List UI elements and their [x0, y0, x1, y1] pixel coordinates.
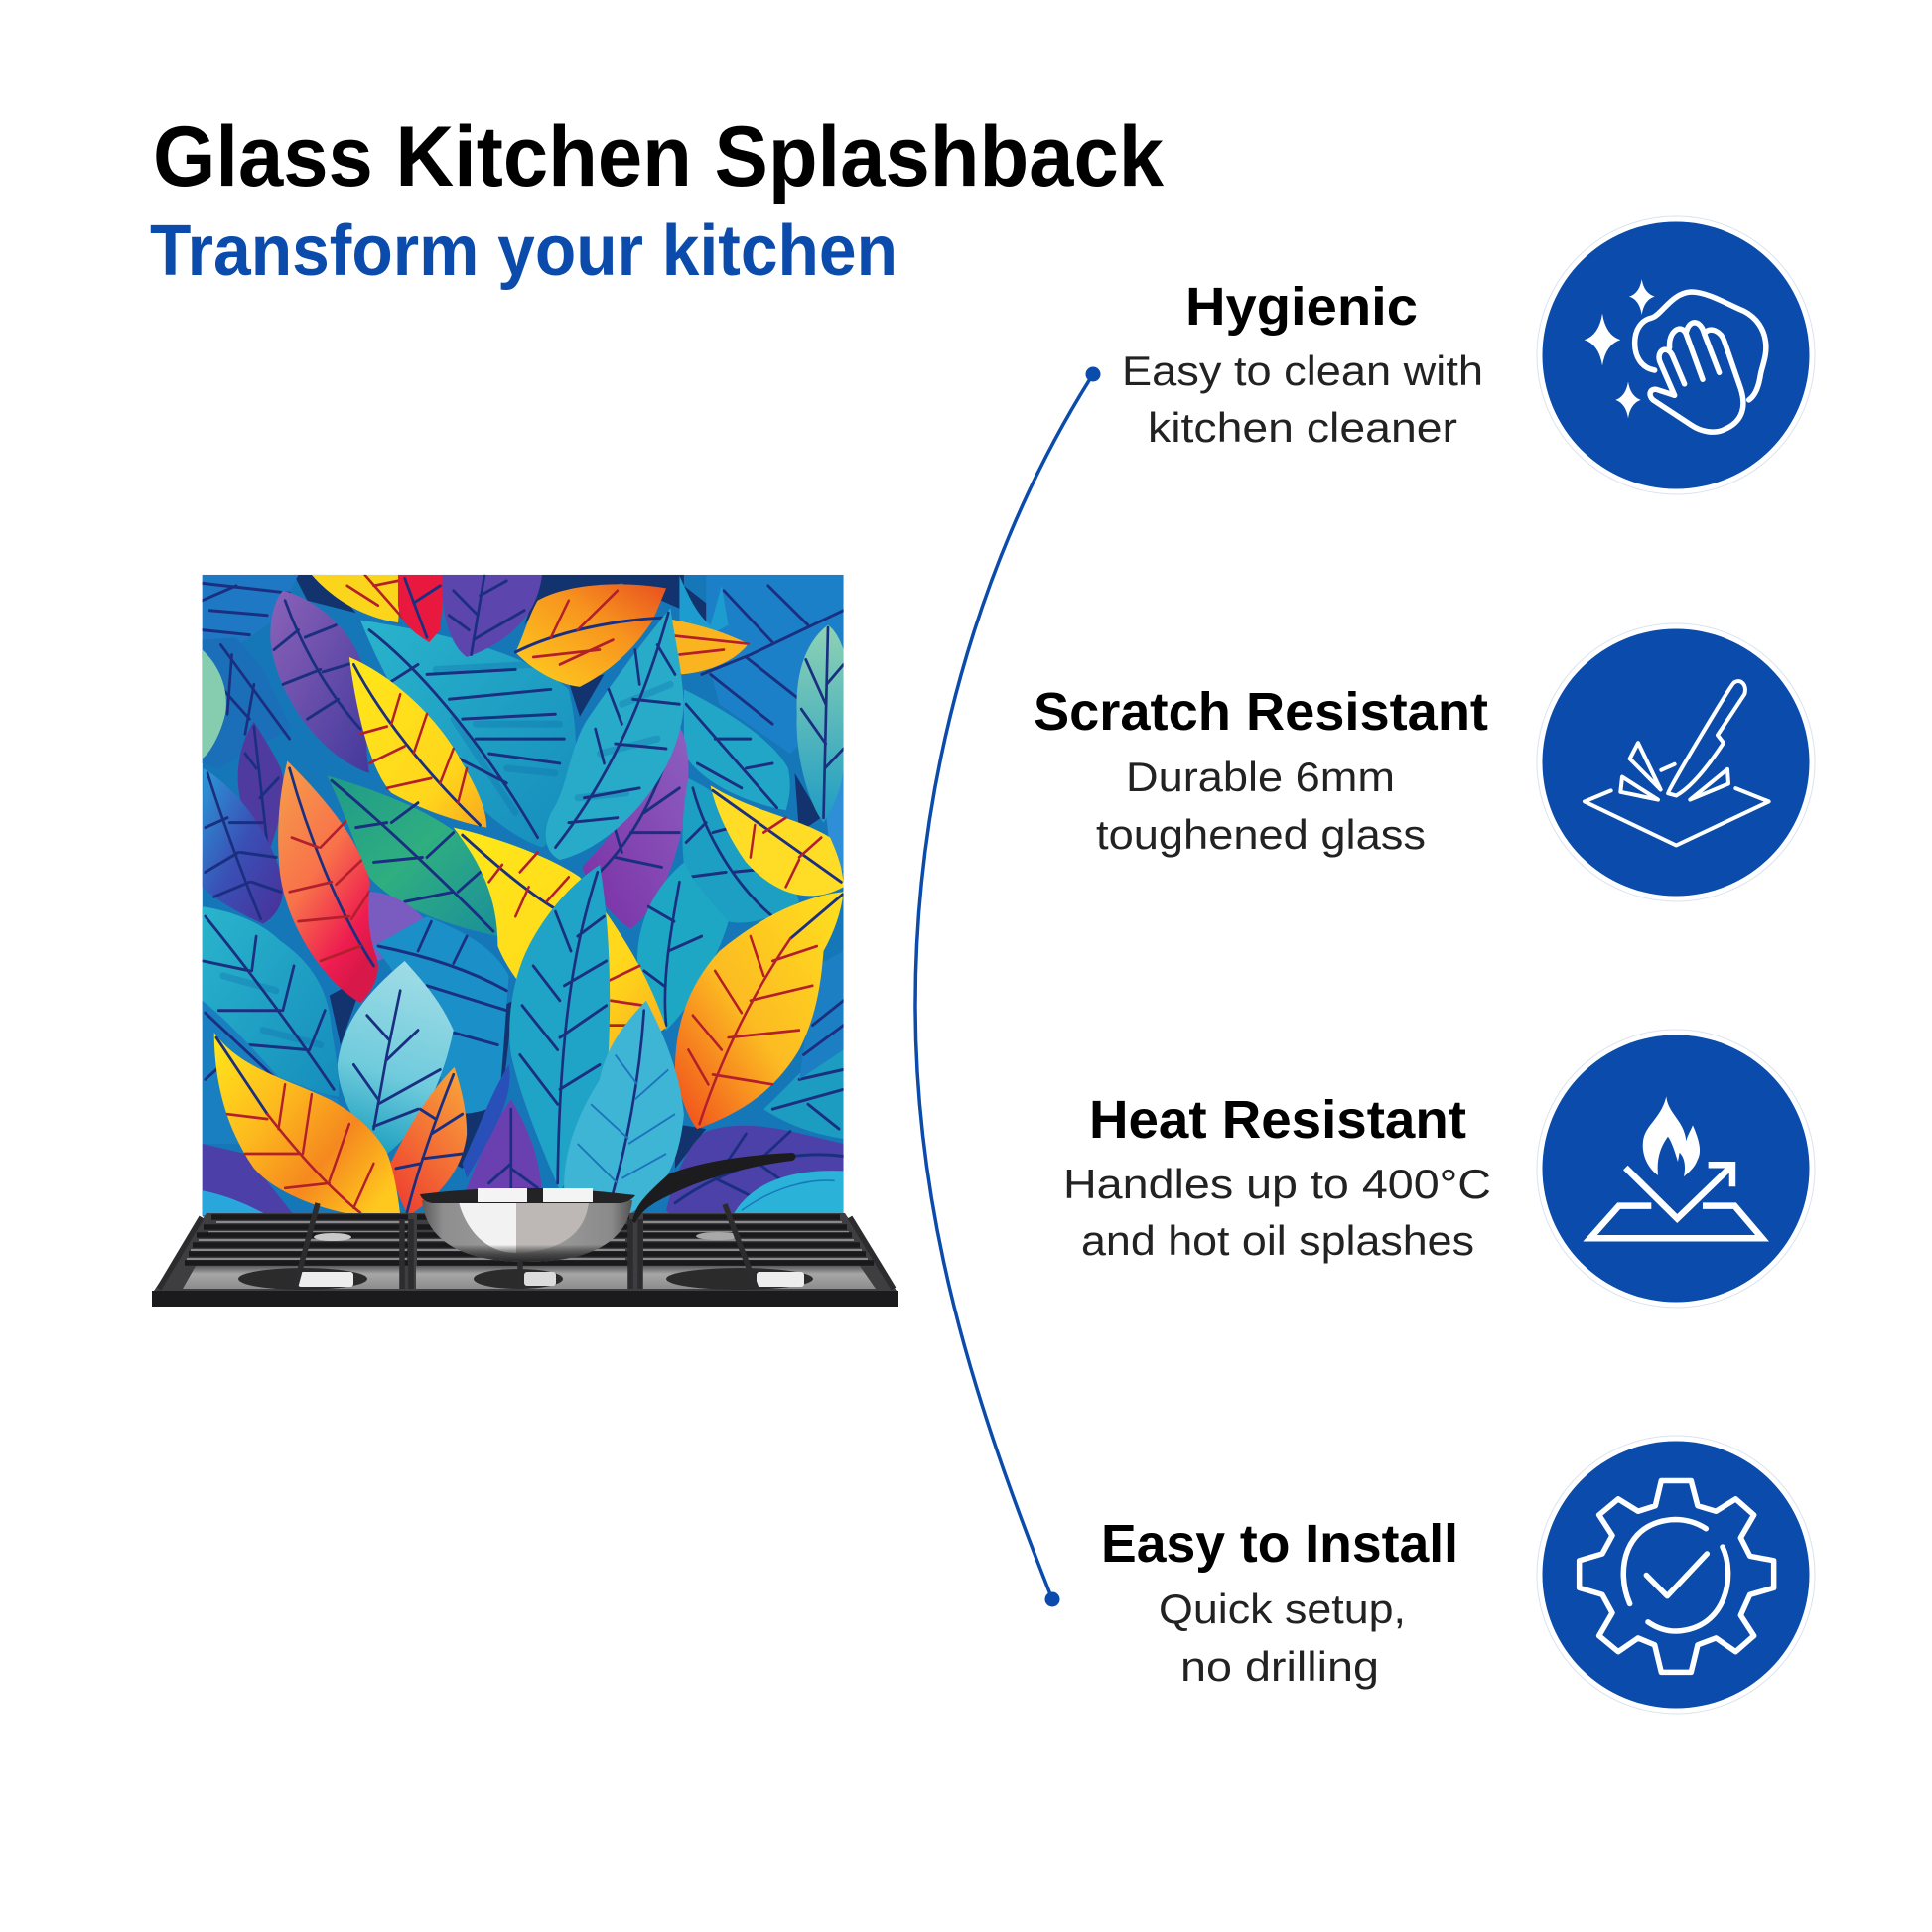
feature: scratch resistant: Scratch Resistant	[1034, 682, 1488, 742]
leaf: teal right upper	[684, 689, 790, 810]
icon: gear with check	[1537, 1436, 1815, 1714]
feature: hygienic	[1122, 277, 1483, 451]
leaf: small purple left	[238, 722, 284, 850]
connector dot top	[1086, 367, 1100, 381]
leaf: right edge blue upper	[826, 769, 844, 872]
splashback panel: colourful leaf pattern	[203, 575, 844, 1217]
feature: hygienic: kitchen cleaner	[1148, 404, 1457, 451]
leaf: top red	[398, 575, 445, 642]
hob front edge	[152, 1291, 898, 1307]
leaf: bottom-left purple	[203, 1144, 294, 1215]
leaf: green right	[796, 625, 844, 823]
leaf: big yellow-orange right	[675, 892, 844, 1129]
leaf: teal right lower	[682, 778, 799, 923]
leaf: top purple	[442, 575, 542, 657]
leaf: purple bottom centre	[467, 1099, 542, 1190]
feature: scratch resistant: Durable 6mm	[1126, 754, 1395, 800]
leaf: yellow upper	[349, 657, 486, 828]
leaf: left blue	[203, 637, 292, 768]
icon: knife scratching glass	[1537, 623, 1815, 901]
leaf: dark blue between bottom	[463, 1064, 510, 1178]
leaf: green centre	[328, 775, 497, 936]
feature: scratch resistant: toughened glass	[1096, 811, 1426, 858]
pan	[420, 1153, 795, 1262]
feature: heat resistant: and hot oil splashes	[1081, 1217, 1474, 1264]
leaf: top yellow	[312, 575, 402, 622]
leaf: bottom purple right	[666, 1126, 844, 1215]
hob body	[154, 1213, 897, 1291]
leaf: purple upper left	[270, 591, 369, 773]
feature: hygienic: Hygienic	[1185, 277, 1418, 337]
feature: heat resistant	[1063, 1090, 1491, 1264]
leaf: small orange bottom	[389, 1067, 467, 1215]
leaf: top right blue	[702, 575, 844, 754]
leaf: teal lower right centre	[637, 862, 729, 1031]
leaf: right edge blue	[799, 951, 844, 1079]
feature: easy to install: no drilling	[1180, 1643, 1379, 1690]
subtitle: Transform your kitchen	[150, 211, 897, 291]
leaf: top orange	[515, 584, 666, 687]
leaf: yellow right	[711, 785, 844, 896]
leaf: blue-teal left lower	[203, 1001, 318, 1144]
hob steel windows	[183, 1266, 876, 1289]
grate bars	[185, 1217, 874, 1263]
leaf: purple small centre	[368, 892, 423, 961]
leaf: orange right	[662, 618, 749, 674]
leaf: purple right of centre	[582, 727, 688, 929]
pan grey reflection	[516, 1202, 589, 1253]
icon: cleaning hand	[1537, 216, 1815, 494]
leaf: blue-teal centre	[373, 916, 509, 1114]
feature: scratch resistant	[1034, 682, 1488, 858]
leaf: left blue-purple	[203, 768, 283, 924]
pan highlights	[478, 1188, 593, 1202]
leaf: orange-red	[278, 760, 378, 1003]
title: Glass Kitchen Splashback	[153, 109, 1164, 205]
leaf: top teal sliver	[679, 576, 729, 631]
leaf: top-left blue	[203, 575, 299, 659]
pan body	[422, 1200, 632, 1262]
leaf: teal upper centre	[360, 621, 576, 848]
connector curve	[915, 374, 1093, 1599]
leaf: yellow centre big	[454, 828, 666, 1062]
leaf: large teal upper centre	[546, 608, 684, 860]
pan bottom shade	[422, 1200, 632, 1262]
burners	[238, 1232, 813, 1290]
feature: heat resistant: Handles up to 400°C	[1063, 1161, 1491, 1207]
grate bar highlights	[187, 1222, 868, 1259]
feature: hygienic: Easy to clean with	[1122, 347, 1483, 394]
leaf: bottom light teal	[733, 1171, 844, 1215]
feature: heat resistant: Heat Resistant	[1089, 1090, 1466, 1150]
connector dot bottom	[1044, 1592, 1060, 1606]
leaf: light teal centre-bottom	[564, 1001, 684, 1216]
feature: easy to install: Easy to Install	[1101, 1514, 1458, 1574]
leaf: bottom-left light blue	[203, 1190, 267, 1215]
leaf: large teal centre	[509, 865, 610, 1190]
leaf: large yellow-orange bottom left	[214, 1033, 400, 1215]
pan handle	[632, 1153, 795, 1223]
grate arms and dividers	[159, 1203, 894, 1289]
pan white reflection	[459, 1202, 516, 1253]
gas hob	[152, 1203, 898, 1307]
leaf: green left edge	[203, 650, 226, 759]
leaf: teal bottom-left large	[203, 906, 339, 1097]
feature: easy to install	[1101, 1514, 1458, 1690]
leaf: teal right	[763, 1031, 844, 1139]
feature: easy to install: Quick setup,	[1159, 1586, 1406, 1632]
pan rim	[420, 1188, 635, 1203]
leaf: pale blue	[338, 961, 454, 1154]
icon: flame heat	[1537, 1030, 1815, 1308]
